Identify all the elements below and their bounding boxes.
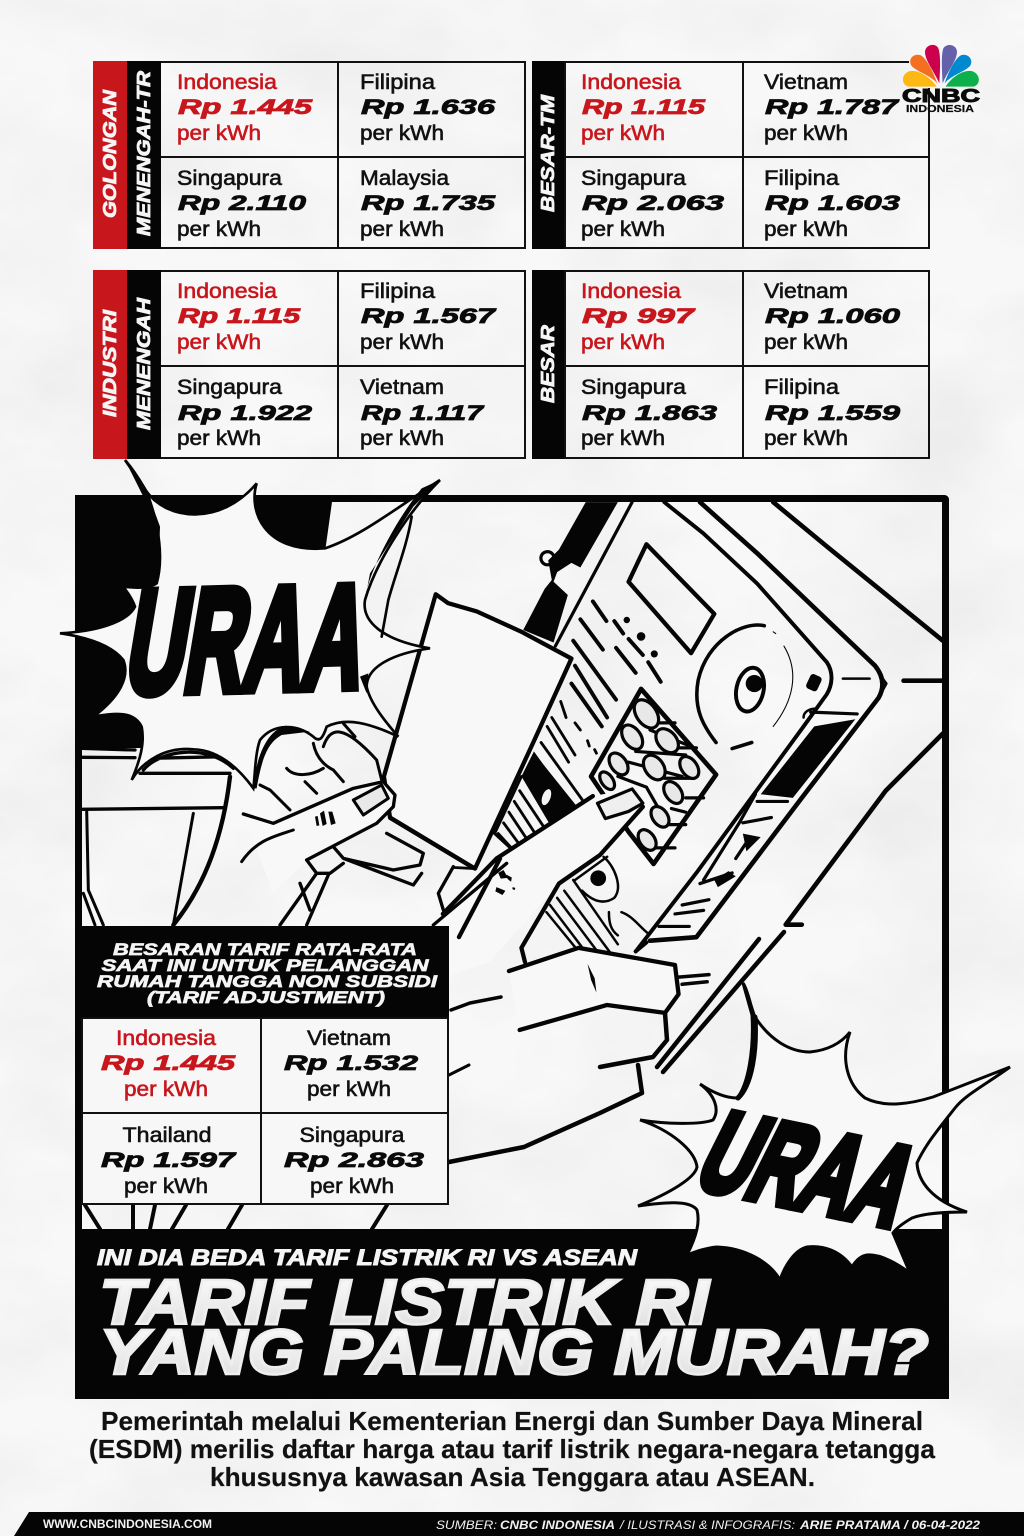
cell: Vietnam [764, 70, 900, 145]
cell: Indonesia [581, 279, 696, 354]
burst: bottom-right speech burst [638, 983, 1010, 1280]
description text: khususnya kawasan Asia Tenggara atau ASEAN. [210, 1462, 815, 1492]
cell: Malaysia: per kWh [360, 217, 444, 241]
cell: Vietnam: Vietnam [360, 375, 444, 399]
cell: Filipina: per kWh [764, 426, 848, 450]
jar body [173, 777, 230, 925]
label: besar-TM: BESAR-TM [538, 94, 558, 212]
cell: Singapura: per kWh [177, 426, 261, 450]
meter black panel [761, 719, 855, 798]
knuckle marks [495, 870, 515, 895]
cell: Vietnam: Vietnam [307, 1026, 391, 1050]
panel: industri menengah table [93, 270, 525, 459]
cell: Singapura: Rp 2.110 [178, 192, 306, 215]
illustration: holding hand [242, 723, 507, 925]
cell: Indonesia: Rp 1.115 [178, 305, 300, 328]
cell: Vietnam: Rp 1.787 [765, 96, 900, 119]
cell: Filipina: Rp 1.636 [361, 96, 495, 119]
panel: besar table [532, 270, 929, 459]
cell: Singapura: Singapura [581, 375, 686, 399]
cell: Filipina: Rp 1.567 [361, 305, 497, 328]
cell: Thailand: Thailand [122, 1123, 212, 1147]
cell: Indonesia: per kWh [124, 1077, 208, 1101]
cell: Singapura [177, 375, 312, 450]
cell: Malaysia [360, 166, 495, 241]
cell: Singapura: Singapura [581, 166, 686, 190]
cell: Indonesia: per kWh [581, 330, 665, 354]
cell: Vietnam [360, 375, 485, 450]
keypad [591, 689, 716, 864]
jar lid [82, 748, 233, 809]
cell: Indonesia [581, 70, 705, 145]
title line 2: YANG PALING MURAH? [99, 1316, 929, 1388]
icon: CNBC Indonesia logo: INDONESIA [906, 104, 974, 115]
cell: Indonesia: Indonesia [177, 70, 277, 94]
cell: Singapura: Rp 2.863 [284, 1149, 425, 1172]
cell: Indonesia: Rp 1.115 [582, 96, 705, 119]
cell: Singapura: per kWh [581, 217, 665, 241]
footer source credits: / ILUSTRASI & INFOGRAFIS: [619, 1518, 795, 1532]
cell: Vietnam [284, 1026, 418, 1101]
cell: Singapura: per kWh [310, 1174, 394, 1198]
cell: Vietnam: Vietnam [764, 279, 848, 303]
black corner behind burst [75, 495, 332, 748]
cell: Filipina: Filipina [360, 70, 435, 94]
cell: Vietnam: per kWh [764, 121, 848, 145]
table heading: SAAT INI UNTUK PELANGGAN [102, 956, 429, 975]
cell: Vietnam [764, 279, 900, 354]
cell: Indonesia: Rp 1.445 [178, 96, 312, 119]
cell: Singapura [581, 375, 717, 450]
second dial and hatch [590, 870, 606, 886]
cell: Thailand [101, 1123, 237, 1198]
frame border [78, 498, 946, 1396]
meter lower-left [521, 751, 575, 825]
cell: Filipina: per kWh [764, 217, 848, 241]
illustration: electric meter and hands [85, 502, 943, 1229]
panel: bottom title banner [75, 1229, 949, 1399]
footer source credits: CNBC INDONESIA [500, 1518, 615, 1532]
cell: Vietnam: per kWh [764, 330, 848, 354]
cell: Singapura: Singapura [177, 375, 282, 399]
footer website: WWW.CNBCINDONESIA.COM [43, 1519, 212, 1531]
cell: Filipina: Rp 1.603 [765, 192, 900, 215]
cell: Singapura: Rp 1.922 [178, 402, 312, 425]
cell: Indonesia [177, 70, 312, 145]
cell: Filipina: Filipina [764, 375, 839, 399]
cell: Vietnam: per kWh [307, 1077, 391, 1101]
cell: Singapura: Singapura [177, 166, 282, 190]
cell: Singapura [177, 166, 306, 241]
burst: top-left speech burst [60, 460, 440, 788]
cell: Filipina [764, 375, 900, 450]
table heading [97, 940, 439, 1007]
label: menengah: MENENGAH [134, 297, 154, 430]
lower arm strokes [451, 997, 501, 1010]
cell: Indonesia: Indonesia [581, 70, 681, 94]
cell: Vietnam: Rp 1.117 [361, 402, 485, 425]
label: industri: INDUSTRI [100, 309, 120, 417]
cell: Malaysia: Malaysia [360, 166, 449, 190]
meter strap [523, 502, 618, 642]
description text [89, 1406, 936, 1492]
panel: besar-TM table [532, 61, 929, 249]
table heading: BESARAN TARIF RATA-RATA [113, 940, 417, 959]
meter text lines [571, 601, 661, 726]
panel: rumah tangga tariff table [75, 926, 449, 1204]
label: besar: BESAR [538, 325, 558, 403]
paper note [384, 594, 571, 869]
meter outline [636, 502, 831, 951]
cell: Indonesia: Indonesia [581, 279, 681, 303]
footer bar [14, 1512, 1024, 1536]
table heading: RUMAH TANGGA NON SUBSIDI [97, 972, 439, 991]
icon: CNBC Indonesia logo [902, 45, 980, 115]
cell: Filipina: Filipina [360, 279, 435, 303]
panel: comic illustration frame [60, 460, 1010, 1399]
cell: Indonesia: per kWh [177, 330, 261, 354]
cell: Vietnam: Vietnam [764, 70, 848, 94]
lower hand [509, 948, 679, 1030]
footer source credits: ARIE PRATAMA / 06-04-2022 [799, 1518, 980, 1532]
cell: Indonesia: per kWh [177, 121, 261, 145]
cell: Indonesia: Indonesia [177, 279, 277, 303]
cell: Thailand: per kWh [124, 1174, 208, 1198]
label: menengah-TR: MENENGAH-TR [134, 71, 154, 236]
cell: Filipina [764, 166, 900, 241]
cell: Thailand: Rp 1.597 [101, 1149, 237, 1172]
cell: Filipina: Rp 1.559 [765, 402, 900, 425]
cell: Filipina [360, 70, 495, 145]
footer source credits: SUMBER: [436, 1518, 497, 1532]
icon: CNBC Indonesia logo: CNBC [902, 85, 980, 106]
cell: Malaysia: Rp 1.735 [361, 192, 495, 215]
title line 1: TARIF LISTRIK RI [99, 1266, 710, 1338]
table heading: (TARIF ADJUSTMENT) [147, 988, 385, 1007]
cell: Singapura: per kWh [177, 217, 261, 241]
cell: Vietnam: Rp 1.060 [765, 305, 900, 328]
label: golongan: GOLONGAN [100, 89, 120, 218]
cell: Singapura [284, 1123, 425, 1198]
burst text: URAA: URAA [117, 555, 380, 725]
cell: Singapura: Rp 1.863 [582, 402, 717, 425]
cell: Indonesia [101, 1026, 235, 1101]
cell: Vietnam: Rp 1.532 [284, 1052, 418, 1075]
cell: Filipina [360, 279, 497, 354]
cell: Indonesia: Rp 1.445 [101, 1052, 235, 1075]
cell: Indonesia: per kWh [581, 121, 665, 145]
meter dial [697, 625, 764, 749]
cell: Filipina: per kWh [360, 121, 444, 145]
subheading: INI DIA BEDA TARIF LISTRIK RI VS ASEAN [97, 1245, 638, 1270]
footer source credits [436, 1518, 980, 1532]
pointing finger [436, 789, 643, 980]
cell: Singapura: Singapura [300, 1123, 405, 1147]
description text: Pemerintah melalui Kementerian Energi dan Sumber Daya Mineral [101, 1406, 923, 1436]
cell: Filipina: per kWh [360, 330, 444, 354]
meter display [629, 544, 714, 653]
cell: Filipina: Filipina [764, 166, 839, 190]
cell: Indonesia: Rp 997 [582, 305, 696, 328]
cell: Singapura: Rp 2.063 [582, 192, 725, 215]
cell: Vietnam: per kWh [360, 426, 444, 450]
description text: (ESDM) merilis daftar harga atau tarif listrik negara-negara tetangga [89, 1434, 936, 1464]
cell: Indonesia: Indonesia [116, 1026, 216, 1050]
cell: Singapura: per kWh [581, 426, 665, 450]
cell: Singapura [581, 166, 725, 241]
cell: Indonesia [177, 279, 300, 354]
panel: golongan menengah-TR table [93, 61, 525, 249]
